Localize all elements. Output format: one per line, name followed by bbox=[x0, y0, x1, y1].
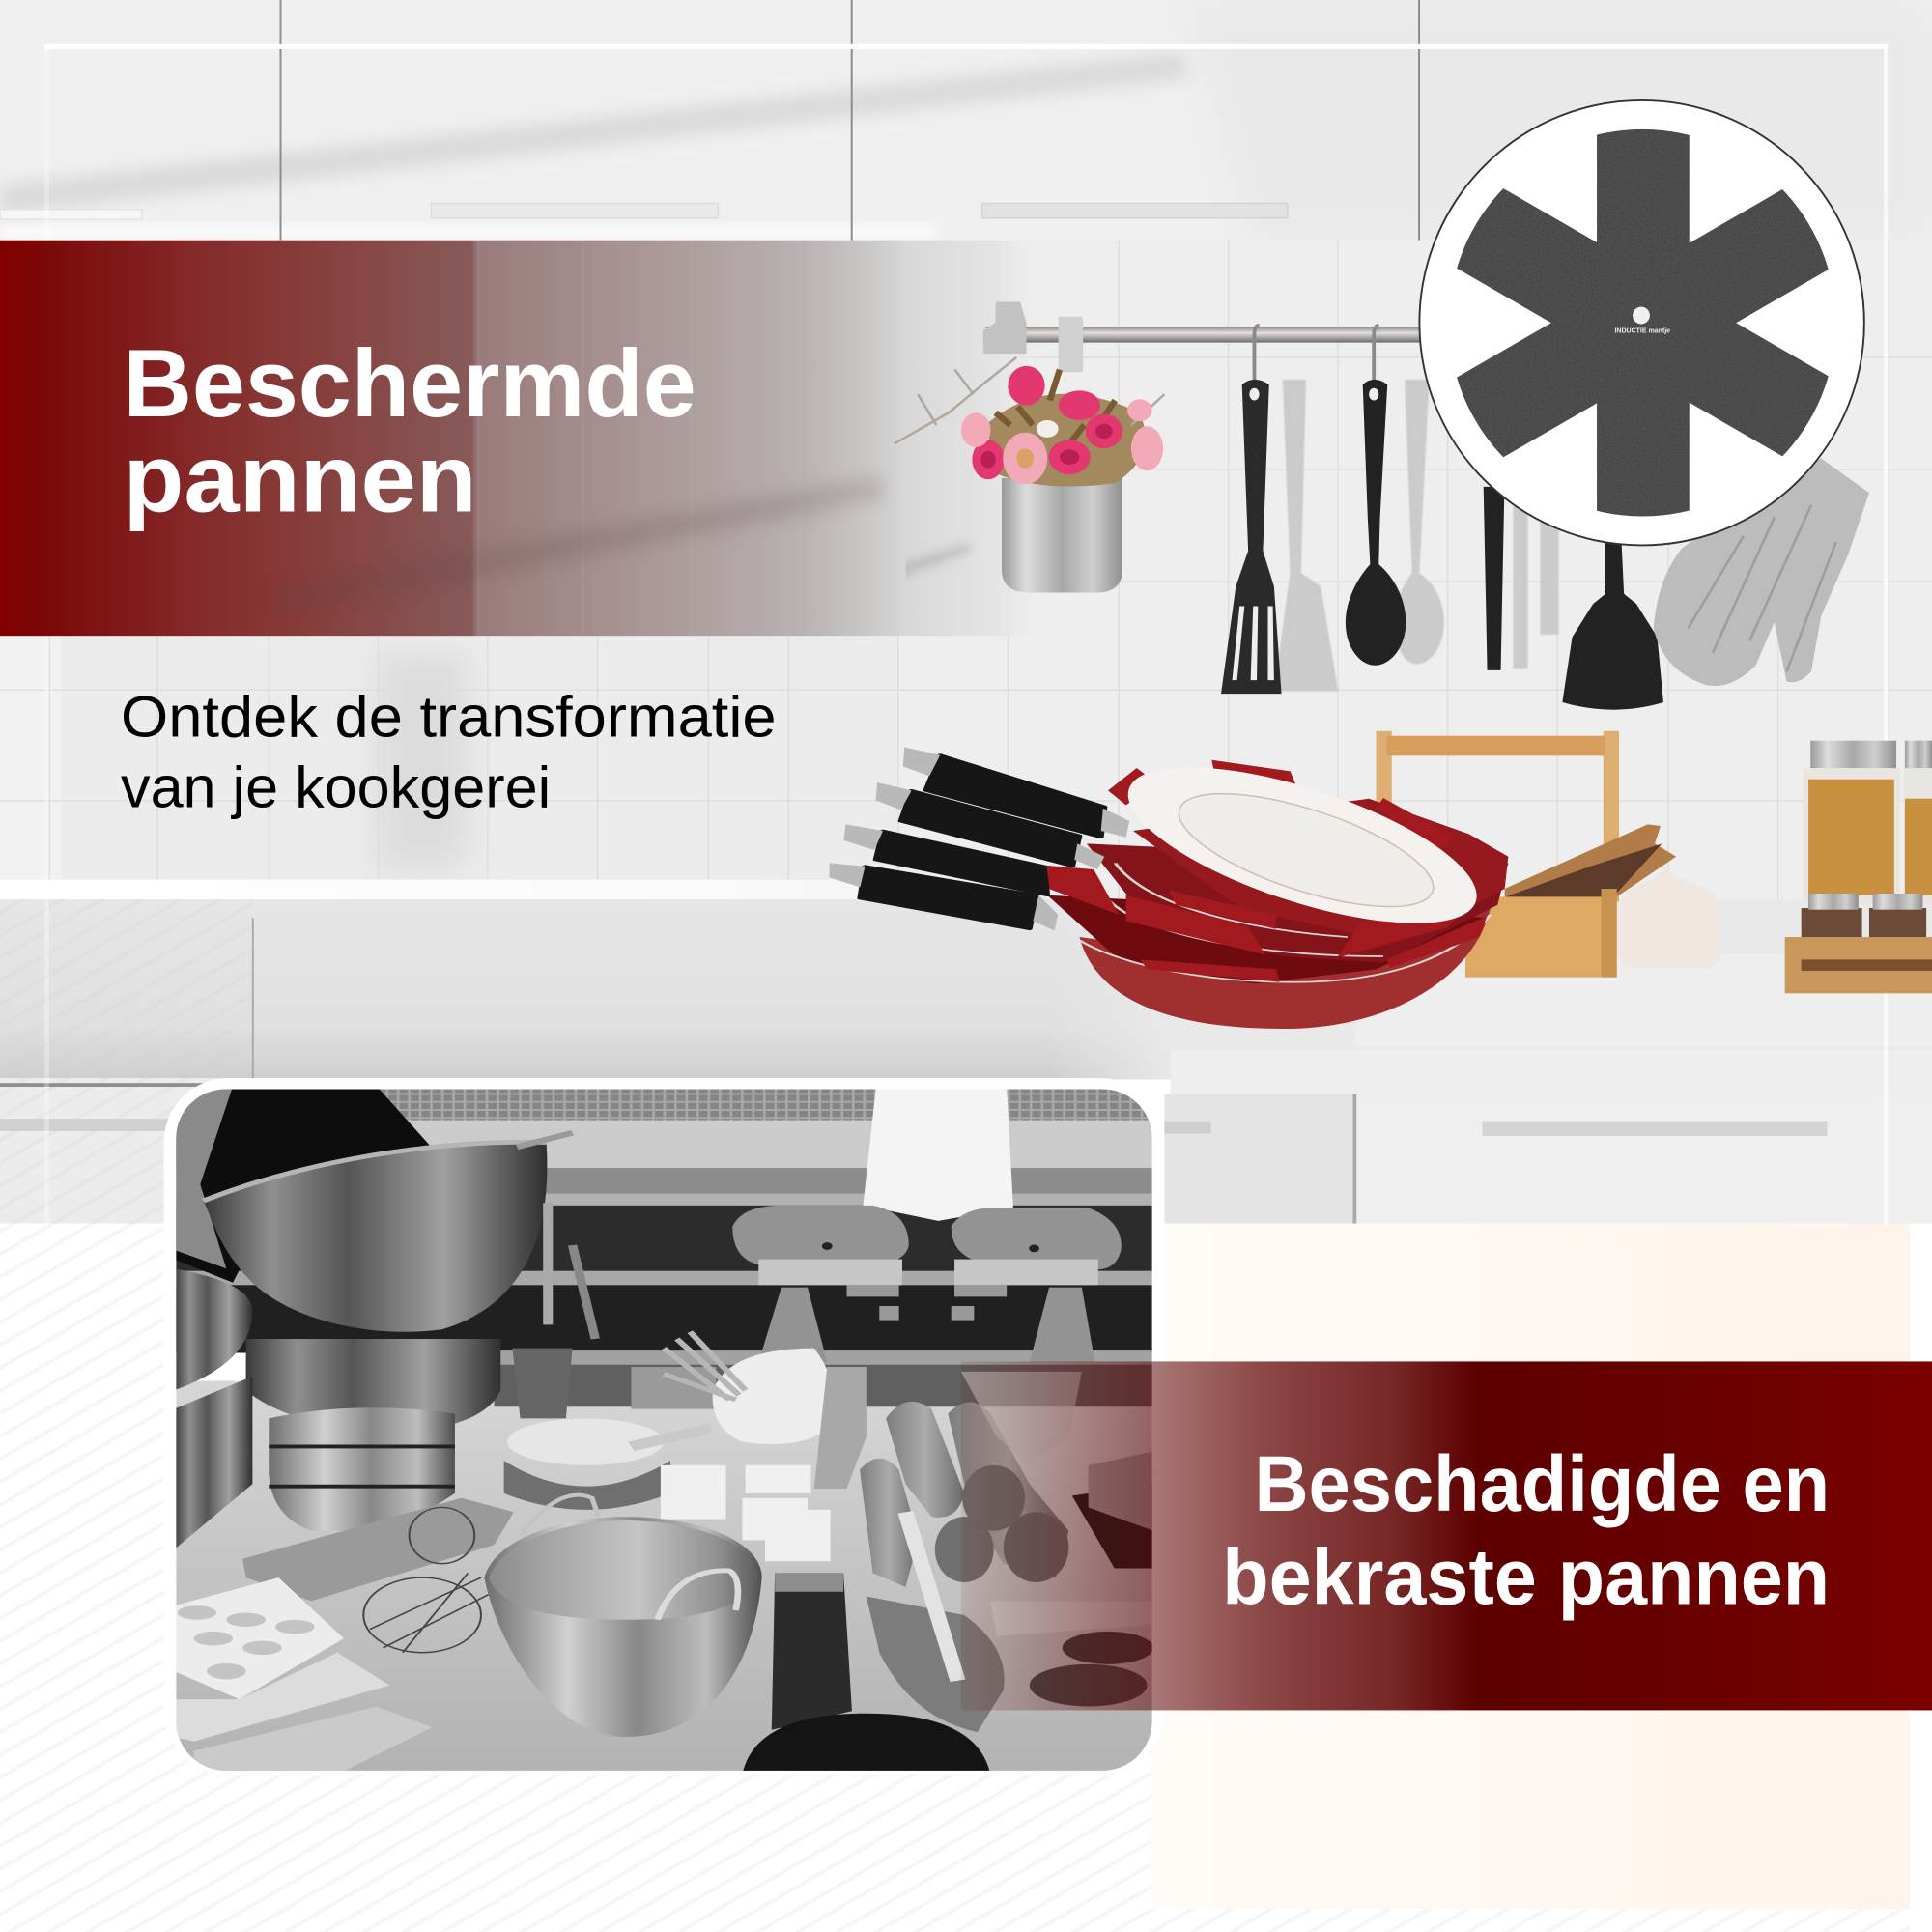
icon: tongs and turner bbox=[1484, 487, 1663, 710]
cupcake and glass cup bbox=[961, 1372, 1082, 1447]
text: Ontdek de transformatie: van je kookgerei bbox=[121, 754, 551, 819]
wooden caddy and utensils bbox=[1376, 731, 1676, 978]
white jar bbox=[1619, 865, 1719, 969]
heading: Beschadigde en bekraste pannen: Beschadigde en bbox=[1254, 1440, 1830, 1528]
heading: Beschadigde en bekraste pannen: bekraste pannen bbox=[1222, 1534, 1830, 1622]
text: Ontdek de transformatie bbox=[121, 685, 777, 819]
heading: Beschermde pannen: pannen bbox=[124, 425, 477, 532]
mortar and pestle bbox=[512, 1349, 573, 1418]
muffin trays bbox=[174, 1577, 344, 1699]
background: kitchen cabinets bbox=[0, 0, 1932, 242]
plates bbox=[507, 1418, 664, 1465]
rolling pins bbox=[886, 1402, 964, 1518]
icon: flower pot bbox=[895, 357, 1164, 593]
black bowl bbox=[742, 1714, 990, 1775]
heading: Beschadigde en bekraste pannen bbox=[1222, 1440, 1830, 1622]
heading: Beschermde pannen bbox=[124, 330, 696, 532]
rail with hooks bbox=[983, 301, 1423, 384]
pot stack bbox=[174, 1086, 436, 1283]
icon: spoon bbox=[1346, 380, 1406, 666]
icon: felt pan protector bbox=[1419, 100, 1864, 545]
utensil shadows on the wall bbox=[1274, 380, 1559, 692]
whisk bbox=[363, 1507, 494, 1653]
rolling pin bbox=[242, 1498, 514, 1601]
chef apron bbox=[863, 1086, 1013, 1221]
tile lines and shadow inside top band bbox=[271, 242, 885, 635]
ladle bbox=[867, 1597, 1005, 1732]
big steel bowl bbox=[484, 1517, 762, 1737]
top red band bbox=[0, 241, 906, 636]
white mug with sticks bbox=[713, 1349, 835, 1444]
white slicers bbox=[661, 1465, 831, 1561]
icon: felt pan protector: INDUCTIE mantje bbox=[1614, 327, 1670, 334]
icon: slotted spatula bbox=[1221, 380, 1282, 694]
thin white frame bbox=[44, 44, 1888, 1225]
icon: oven mitt bbox=[1654, 458, 1869, 686]
heading: Beschermde pannen: Beschermde bbox=[124, 330, 696, 438]
background: lower panel bbox=[0, 1224, 1932, 1932]
stacked red pans with felt protectors bbox=[830, 747, 1508, 1029]
background: counter and lower cabinets bbox=[0, 880, 1932, 1224]
text: Ontdek de transformatie: Ontdek de transformatie bbox=[121, 685, 777, 750]
photo: damaged cookware bbox=[155, 1078, 1179, 1779]
white plate on the pans bbox=[1112, 735, 1493, 955]
box grater bbox=[772, 1573, 852, 1730]
bottom red band bbox=[961, 1361, 1932, 1710]
pasta jars and spice crate bbox=[1785, 741, 1932, 993]
background: tiled wall bbox=[0, 241, 1932, 899]
